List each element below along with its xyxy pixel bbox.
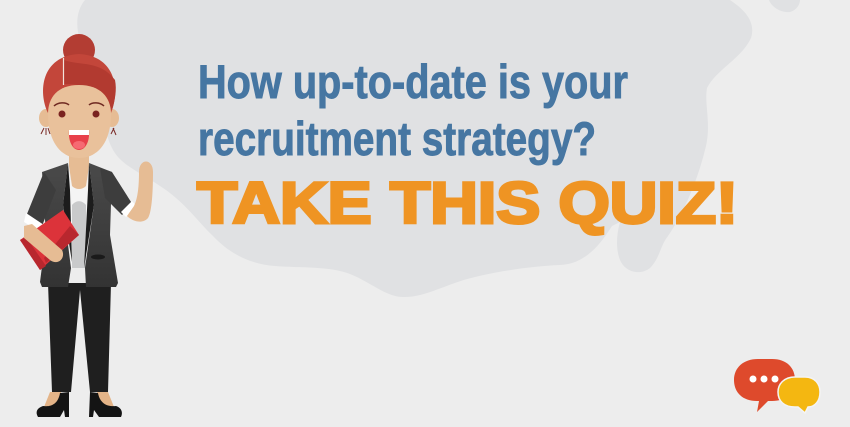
red speech bubble <box>734 359 795 412</box>
book <box>20 210 79 270</box>
yellow speech bubble <box>778 377 820 413</box>
hair parting <box>62 58 64 85</box>
pocket <box>91 254 105 260</box>
call to action: take this quiz: TAKE THIS QUIZ! <box>197 171 738 236</box>
hair bun <box>63 34 95 66</box>
shoes <box>37 392 122 417</box>
earrings <box>41 128 116 135</box>
brows <box>54 103 104 106</box>
left cuff <box>24 213 44 232</box>
dots <box>750 376 778 382</box>
hair <box>43 54 115 113</box>
background blob <box>77 0 800 297</box>
right sleeve <box>100 168 133 215</box>
question heading: recruitment strategy? <box>198 112 596 165</box>
foot skin <box>44 392 114 407</box>
question heading <box>198 55 628 165</box>
left sleeve <box>27 172 56 226</box>
question heading: How up-to-date is your <box>198 55 628 108</box>
raised arm <box>127 162 153 222</box>
jacket <box>40 163 118 287</box>
forearm <box>24 224 63 262</box>
icon: chat bubbles <box>734 359 820 413</box>
character: businesswoman <box>20 34 153 417</box>
trousers <box>48 283 111 392</box>
neck <box>69 150 89 189</box>
ears <box>39 109 53 127</box>
shirt <box>68 180 90 268</box>
mouth <box>69 130 89 150</box>
eyes <box>58 110 66 118</box>
face <box>48 85 111 158</box>
hair shade <box>64 60 116 110</box>
lapels <box>63 163 94 268</box>
right cuff <box>121 201 137 217</box>
